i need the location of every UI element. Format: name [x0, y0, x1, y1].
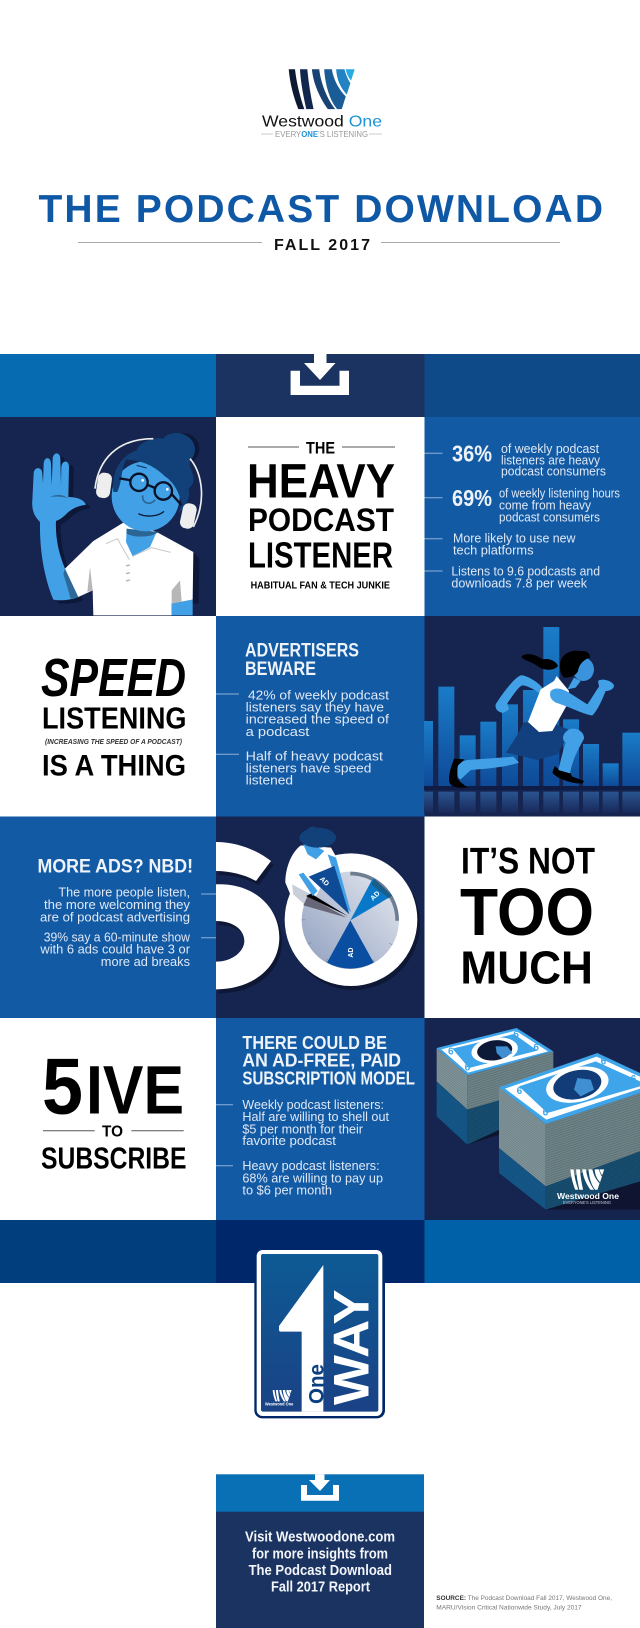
sign text: One: One [304, 1364, 328, 1404]
source note: SOURCE: The Podcast Download Fall 2017, Westwood One, [436, 1595, 612, 1602]
panel: ad-free subscription model: Half are willing to shell out [242, 1109, 389, 1124]
numeral 0 ring [287, 857, 420, 990]
icon: one way road sign [254, 1247, 385, 1418]
panel: heavy listener stats: podcast consumers [501, 463, 606, 478]
bill denomination marks: 6 [465, 1063, 471, 1074]
head [112, 461, 180, 531]
numeral 6 [216, 842, 282, 993]
panel: heavy listener stats: More likely to use new [453, 531, 576, 546]
front stack of bills [499, 1053, 640, 1210]
logo: white Westwood One: EVERYONE'S LISTENING [563, 1200, 612, 1205]
panel: heavy podcast listener heading [216, 417, 424, 616]
panel: 5ive to subscribe: TO [102, 1124, 123, 1141]
arm and hand [32, 453, 86, 600]
panel: more ads NBD: The more people listen, [58, 885, 190, 900]
call to action block [216, 1474, 424, 1628]
panel: 5ive to subscribe [0, 1018, 216, 1220]
figure placing ad wedge: AD [318, 876, 330, 888]
panel: heavy listener stats: of weekly podcast [501, 441, 599, 456]
panel: heavy listener stats [424, 417, 640, 616]
panel: 60 minute clock illustration [216, 816, 424, 1018]
panel: heavy listener illustration [0, 417, 216, 616]
panel: advertisers beware [216, 616, 424, 816]
headphones [95, 439, 202, 527]
panel: ad-free subscription model: 68% are willing to pay up [242, 1170, 383, 1185]
panel: advertisers beware: increased the speed of [246, 712, 389, 727]
panel: advertisers beware: BEWARE [245, 659, 316, 680]
panel: ad-free subscription model [216, 1018, 424, 1220]
panel: heavy listener stats: tech platforms [453, 543, 534, 558]
panel: speed listening heading: SPEED [41, 648, 186, 708]
bill denomination marks: 6 [448, 1047, 454, 1058]
figure placing ad wedge [285, 827, 351, 918]
panel: more ads NBD: the more welcoming they [44, 897, 191, 912]
back stack of bills [437, 1028, 553, 1145]
panel: more ads NBD: with 6 ads could have 3 or [39, 942, 191, 957]
logo: white Westwood One [557, 1169, 619, 1205]
panel: more ads NBD: more ad breaks [101, 954, 190, 969]
panel: advertisers beware: listeners have speed [246, 761, 371, 776]
panel: it's not too much [424, 816, 640, 1018]
call to action text [245, 1530, 395, 1596]
panel: ad-free subscription model: Heavy podcast listeners: [242, 1158, 380, 1173]
panel: it's not too much: IT’S NOT [461, 840, 595, 881]
panel: heavy podcast listener heading: PODCAST [248, 502, 394, 538]
panel: speed listening heading: LISTENING [42, 700, 186, 735]
call to action text: for more insights from [252, 1546, 388, 1562]
panel: advertisers beware: listeners say they have [246, 700, 384, 715]
panel: ad-free subscription model: Weekly podcast listeners: [242, 1097, 384, 1112]
panel: heavy listener stats: Listens to 9.6 podcasts and [451, 564, 600, 579]
logo: white Westwood One: Westwood One [557, 1191, 619, 1201]
panel: 5ive to subscribe: IVE [86, 1051, 184, 1128]
bill denomination marks [448, 1029, 637, 1118]
panel: ad-free subscription model: AN AD-FREE, PAID [242, 1050, 401, 1071]
glasses [119, 474, 182, 505]
panel: advertisers beware: listened [246, 773, 293, 788]
panel: ad-free subscription model: THERE COULD BE [242, 1032, 387, 1053]
title: THE PODCAST DOWNLOAD [38, 188, 603, 231]
bill denomination marks: 6 [517, 1086, 523, 1097]
panel: speed listening heading [0, 616, 216, 816]
bill denomination marks: 6 [631, 1074, 637, 1085]
AD labels: AD [348, 948, 355, 958]
panel: heavy podcast listener heading: THE [306, 438, 335, 457]
panel: speed listening heading: IS A THING [42, 750, 186, 783]
panel: runner illustration [424, 616, 640, 816]
bill denomination marks: 6 [601, 1057, 607, 1068]
bill denomination marks: 6 [533, 1043, 539, 1054]
panel: more ads NBD: 39% say a 60-minute show [44, 929, 191, 944]
call to action text: The Podcast Download [249, 1563, 392, 1579]
panel: heavy listener stats: 36% [452, 441, 492, 467]
panel: money stacks illustration [424, 1018, 640, 1220]
panel: ad-free subscription model: SUBSCRIPTION MODEL [242, 1067, 415, 1088]
logo wordmark: Westwood One [262, 114, 382, 130]
panel: heavy listener stats: of weekly listening hours [499, 485, 620, 500]
panel: advertisers beware: 42% of weekly podcast [248, 687, 389, 702]
icon: W mark [289, 69, 355, 109]
panel: 5ive to subscribe: SUBSCRIBE [41, 1140, 186, 1175]
logo: Westwood One [261, 69, 382, 139]
panel: more ads NBD: are of podcast advertising [40, 909, 190, 924]
panel: heavy podcast listener heading: HABITUAL FAN & TECH JUNKIE [251, 580, 390, 592]
panel: advertisers beware: a podcast [246, 724, 310, 739]
top colour band with download icon [0, 354, 640, 417]
panel: advertisers beware: Half of heavy podcast [246, 748, 383, 763]
neck [126, 529, 157, 556]
panel: more ads NBD [0, 816, 216, 1018]
panel: it's not too much: MUCH [460, 941, 593, 993]
panel: ad-free subscription model: $5 per month for their [242, 1121, 364, 1136]
subtitle: Fall 2017: FALL 2017 [274, 237, 370, 254]
shirt [65, 521, 193, 615]
bottom colour band [0, 1220, 640, 1283]
shadows [37, 433, 199, 604]
panel: more ads NBD: MORE ADS? NBD! [38, 857, 193, 878]
bill denomination marks: 6 [543, 1107, 549, 1118]
bill denomination marks: 6 [513, 1029, 519, 1040]
panel: advertisers beware: ADVERTISERS [245, 641, 359, 662]
source note [436, 1595, 612, 1611]
runner figure [449, 651, 614, 788]
panel: heavy podcast listener heading: LISTENER [248, 535, 393, 576]
panel: heavy podcast listener heading: HEAVY [247, 454, 395, 508]
panel: heavy listener stats: podcast consumers [499, 510, 600, 525]
logo: small white mark [265, 1390, 294, 1407]
panel: speed listening heading: (INCREASING THE SPEED OF A PODCAST) [45, 739, 183, 746]
hair [113, 433, 195, 514]
clock face [302, 872, 399, 969]
call to action text: Visit Westwoodone.com [245, 1530, 395, 1546]
arrow [279, 1265, 323, 1412]
panel: 5ive to subscribe: 5 [42, 1041, 83, 1130]
panel: heavy listener stats: downloads 7.8 per week [451, 576, 587, 591]
logo: small white mark: Westwood One [265, 1402, 294, 1407]
call to action text: Fall 2017 Report [271, 1580, 370, 1596]
panel: 60 minute clock illustration: AD [369, 890, 382, 902]
panel: heavy listener stats: 69% [452, 485, 492, 511]
icon: small download tray [301, 1474, 339, 1501]
panel: heavy listener stats: listeners are heavy [501, 452, 600, 467]
panel: ad-free subscription model: favorite podcast [242, 1133, 336, 1148]
sign text: WAY: WAY [323, 1289, 379, 1405]
bar chart backdrop [424, 627, 640, 786]
icon: download tray [291, 354, 349, 395]
panel: ad-free subscription model: to $6 per month [242, 1182, 332, 1197]
logo tagline: EVERYONE'S LISTENING [275, 129, 368, 139]
panel: heavy listener stats: come from heavy [499, 497, 591, 512]
source note: MARU/Vision Critical Nationwide Study, July 2017 [436, 1604, 582, 1611]
panel: it's not too much: TOO [460, 875, 594, 950]
